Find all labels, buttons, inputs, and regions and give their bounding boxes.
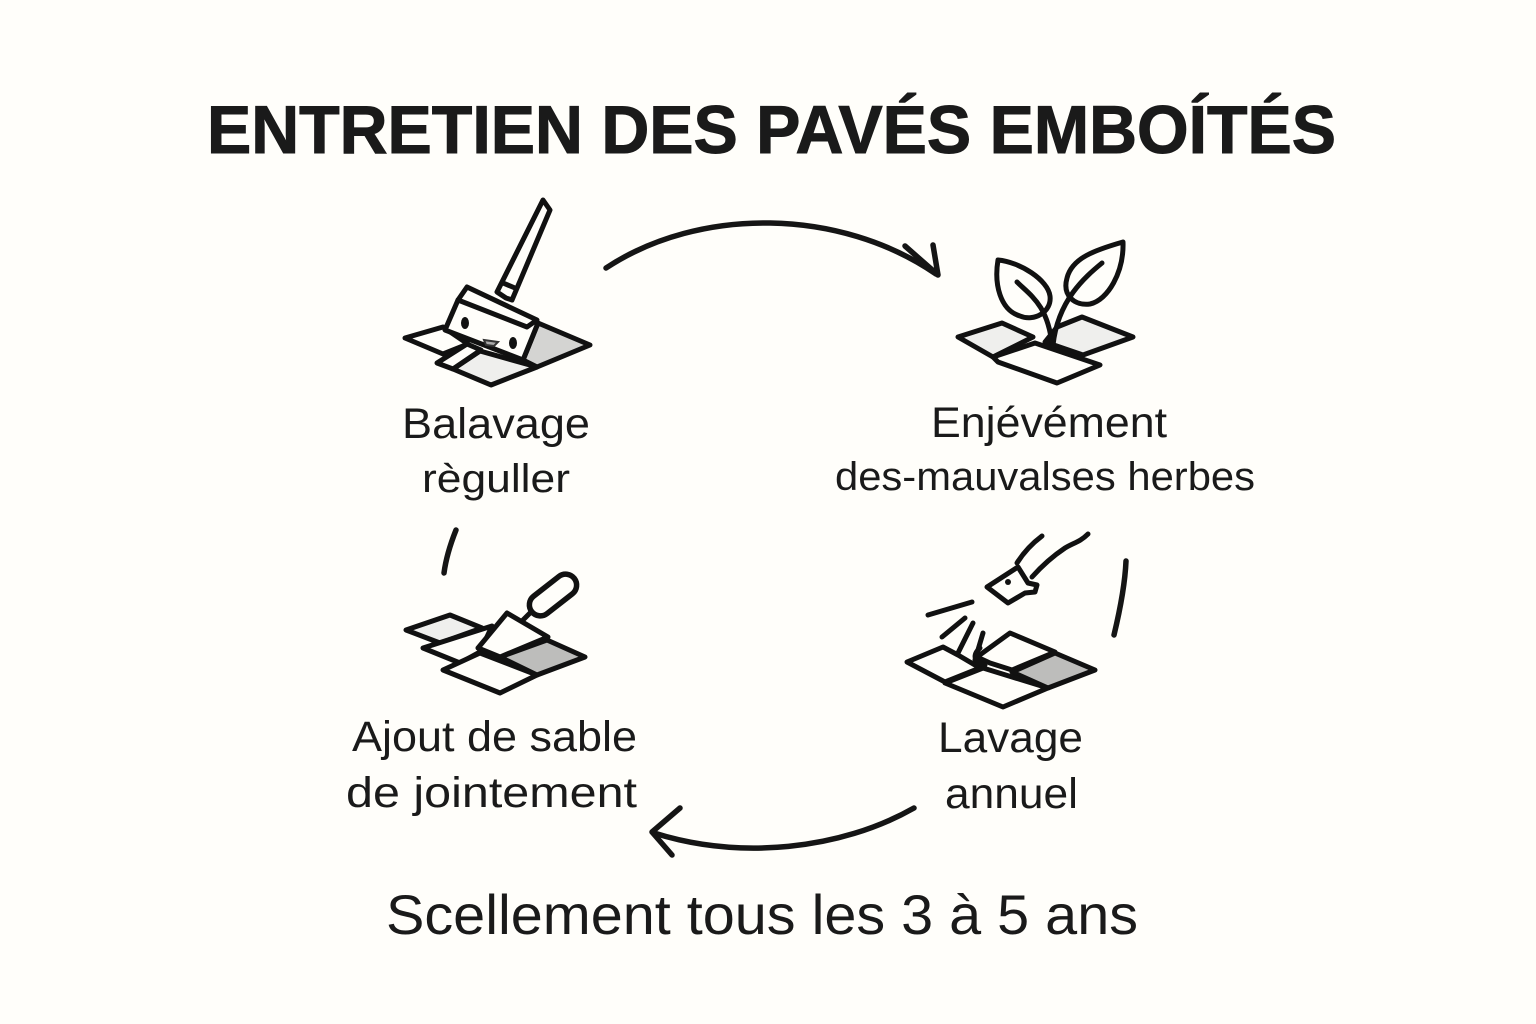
label: Lavage annuel xyxy=(938,714,1083,818)
icon: broom on pavers xyxy=(405,200,590,385)
label: Lavage annuel: Lavage xyxy=(938,714,1083,762)
arrow: bottom curved xyxy=(652,808,914,855)
label: Ajout de sable de jointement: de jointement xyxy=(346,769,637,817)
icon: trowel on pavers xyxy=(406,570,585,693)
arrow: left tick xyxy=(444,530,456,573)
arrow: top curved xyxy=(606,223,938,275)
label: Enlevement des mauvaises herbes xyxy=(835,399,1255,499)
label: Balavage regulier: Balavage xyxy=(402,400,590,448)
icon: plant between pavers xyxy=(958,242,1133,383)
icon: pressure washer on pavers xyxy=(907,534,1095,707)
footer text: Scellement tous les 3 à 5 ans xyxy=(386,883,1138,946)
label: Enlevement des mauvaises herbes: Enjévément xyxy=(931,399,1167,447)
label: Ajout de sable de jointement xyxy=(346,713,637,817)
arrow: right tick xyxy=(1114,561,1126,635)
label: Enlevement des mauvaises herbes: des-mauvalses herbes xyxy=(835,455,1255,499)
label: Balavage regulier xyxy=(402,400,590,501)
title: ENTRETIEN DES PAVÉS EMBOÍTÉS xyxy=(207,92,1336,168)
label: Lavage annuel: annuel xyxy=(945,770,1078,818)
label: Ajout de sable de jointement: Ajout de sable xyxy=(352,713,637,761)
label: Balavage regulier: règuller xyxy=(422,457,570,501)
